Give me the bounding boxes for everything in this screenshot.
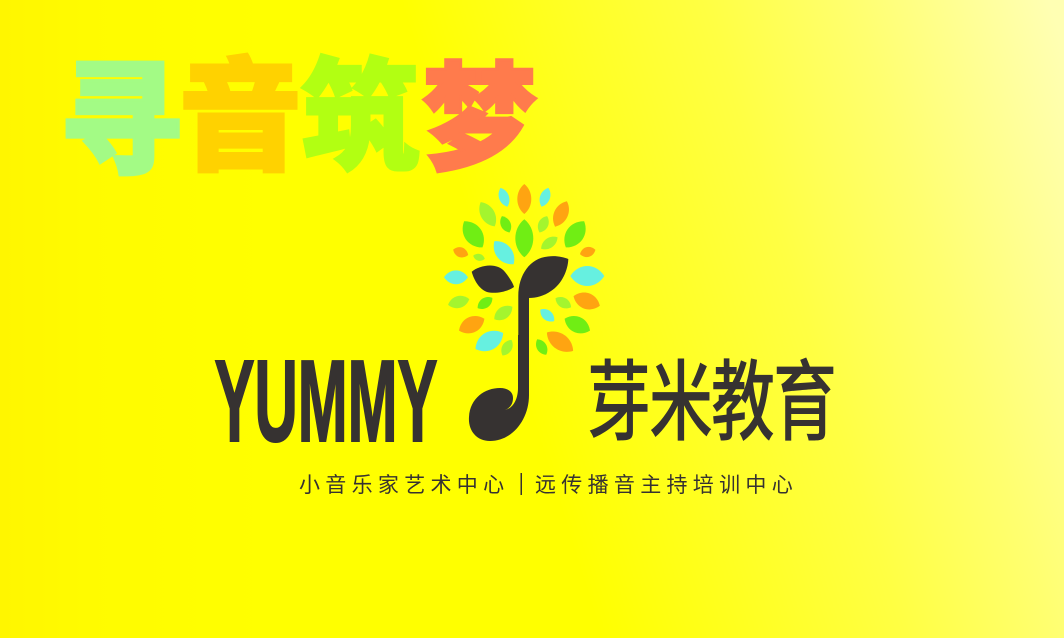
icon: tree leaves [444,184,604,358]
tagline [299,473,798,497]
brand name: 芽米教育 [587,354,837,452]
title: 筑 [301,51,419,186]
brand name: 芽米教育: 育 [773,354,837,452]
brand name: YUMMY: YUMMY [214,336,438,466]
title: 音 [179,50,302,186]
title: 梦 [422,54,536,186]
brand name: 芽米教育: 教 [711,354,775,452]
tagline: 远传播音主持培训中心 [535,474,798,497]
title: 寻 [59,52,183,190]
title [59,50,536,190]
brand name: 芽米教育: 米 [649,354,713,452]
icon: music note sprout [469,256,568,441]
tagline: 小音乐家艺术中心 [299,474,509,497]
brand name: 芽米教育: 芽 [587,354,651,452]
